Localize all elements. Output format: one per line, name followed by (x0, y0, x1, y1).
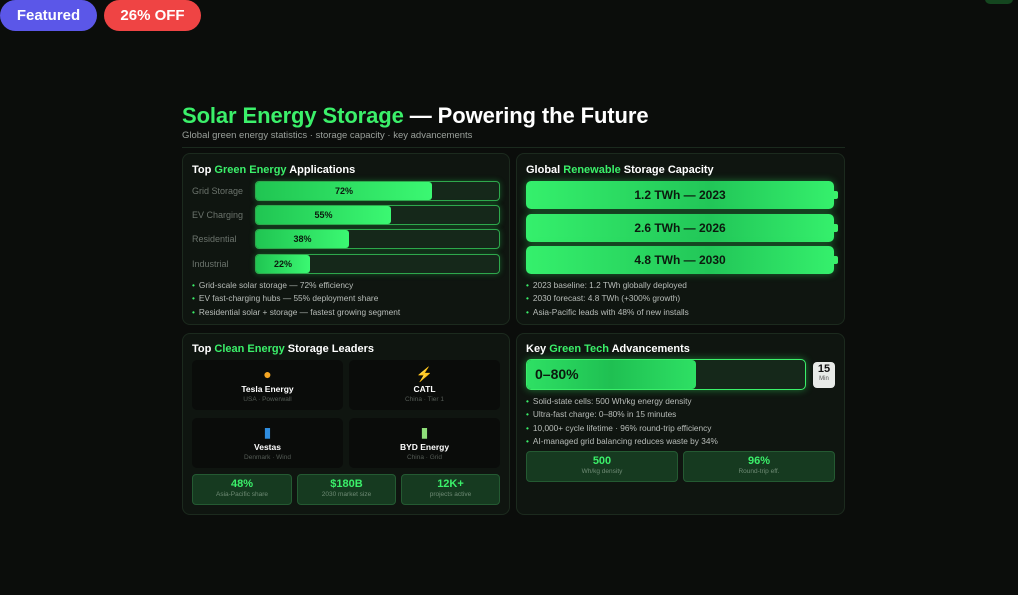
panel: capacity: 2030 forecast: 4.8 TWh (+300% growth) (533, 293, 680, 303)
bar: industrial (192, 251, 503, 277)
bullets: capacity (526, 280, 689, 317)
card: catl: China · Tier 1 (405, 396, 444, 403)
heading: advancements: Key Green Tech Advancements (526, 343, 690, 355)
card: tesla: USA · Powerwall (243, 396, 292, 403)
bar: residential (192, 226, 503, 252)
card: vestas: ▮ (264, 424, 271, 440)
badge: discount (104, 0, 201, 31)
stat: efficiency: 96% (748, 455, 770, 467)
badge: 15 min: 15 (818, 363, 830, 375)
progress: fast charge: 0–80% (535, 366, 579, 382)
bar: 2030: 4.8 TWh — 2030 (634, 253, 726, 267)
stat: density (526, 451, 678, 482)
stat: asia share (192, 474, 292, 505)
stat: efficiency (683, 451, 835, 482)
subtitle: Global green energy statistics · storage capacity · key advancements (182, 130, 472, 141)
card: byd: ▮ (421, 424, 428, 440)
bar: 2026: 2.6 TWh — 2026 (634, 221, 726, 235)
bar: 2030 (526, 246, 834, 274)
card: byd: BYD Energy (400, 442, 449, 452)
card: vestas: Denmark · Wind (244, 454, 291, 461)
stat: density: 500 (593, 455, 611, 467)
panel: advancements: 10,000+ cycle lifetime · 96% round-trip efficiency (533, 423, 711, 433)
card: catl: ⚡ (416, 366, 433, 382)
card: byd (349, 418, 500, 468)
panel: applications: Industrial (192, 259, 229, 269)
panel: advancements: Solid-state cells: 500 Wh/kg energy density (533, 396, 692, 406)
card: byd: China · Grid (407, 454, 442, 461)
stat: efficiency: Round-trip eff. (738, 468, 780, 475)
card: vestas (192, 418, 343, 468)
stat: projects: 12K+ (437, 478, 464, 490)
panel: advancements: Ultra-fast charge: 0–80% in 15 minutes (533, 409, 676, 419)
panel: applications: 38% (293, 234, 312, 244)
stat: market size (297, 474, 396, 505)
heading: leaders: Top Clean Energy Storage Leaders (192, 343, 374, 355)
stat: asia share: Asia-Pacific share (216, 491, 268, 498)
card: tesla: Tesla Energy (241, 384, 294, 394)
title: Solar Energy Storage — Powering the Future (182, 103, 648, 128)
panel: applications: Grid-scale solar storage — 72% efficiency (199, 280, 353, 290)
badge: 15 min (813, 362, 835, 388)
panel: applications: EV fast-charging hubs — 55% deployment share (199, 293, 378, 303)
panel: applications (182, 153, 510, 325)
card: catl: CATL (413, 384, 436, 394)
bar: 2023 (526, 181, 834, 209)
panel: applications: 55% (314, 210, 332, 220)
bar: 2026 (526, 214, 834, 242)
panel: leaders (182, 333, 510, 515)
panel: applications: 22% (274, 259, 292, 269)
heading: capacity: Global Renewable Storage Capacity (526, 164, 714, 176)
stat: asia share: 48% (231, 478, 253, 490)
bar: ev charging (192, 202, 503, 228)
status indicator (985, 0, 1013, 4)
panel: applications: EV Charging (192, 210, 243, 220)
bar: grid storage (192, 178, 503, 204)
card: catl (349, 360, 500, 410)
heading: applications: Top Green Energy Applications (192, 164, 355, 176)
bar: 2023: 1.2 TWh — 2023 (634, 188, 726, 202)
card: vestas: Vestas (254, 442, 281, 452)
badge: discount: 26% OFF (120, 7, 185, 24)
card: tesla (192, 360, 343, 410)
panel: advancements (516, 333, 845, 515)
card: tesla: ● (263, 366, 272, 382)
panel: capacity (516, 153, 845, 325)
badge: 15 min: Min (819, 376, 829, 382)
panel: applications: Residential solar + storage — fastest growing segment (199, 307, 400, 317)
badge: featured: Featured (17, 7, 80, 24)
stat: density: Wh/kg density (582, 468, 622, 475)
progress: fast charge (526, 359, 806, 390)
stat: market size: 2030 market size (322, 491, 371, 498)
panel: capacity: Asia-Pacific leads with 48% of new installs (533, 307, 689, 317)
stat: projects (401, 474, 500, 505)
stat: projects: projects active (430, 491, 471, 498)
bullets: advancements (526, 396, 718, 446)
badge: featured (0, 0, 97, 31)
panel: applications: Residential (192, 234, 237, 244)
panel: applications: Grid Storage (192, 186, 243, 196)
bullets: applications (192, 280, 400, 317)
panel: capacity: 2023 baseline: 1.2 TWh globally deployed (533, 280, 687, 290)
panel: applications: 72% (335, 186, 353, 196)
panel: advancements: AI-managed grid balancing reduces waste by 34% (533, 436, 718, 446)
stat: market size: $180B (330, 478, 363, 490)
